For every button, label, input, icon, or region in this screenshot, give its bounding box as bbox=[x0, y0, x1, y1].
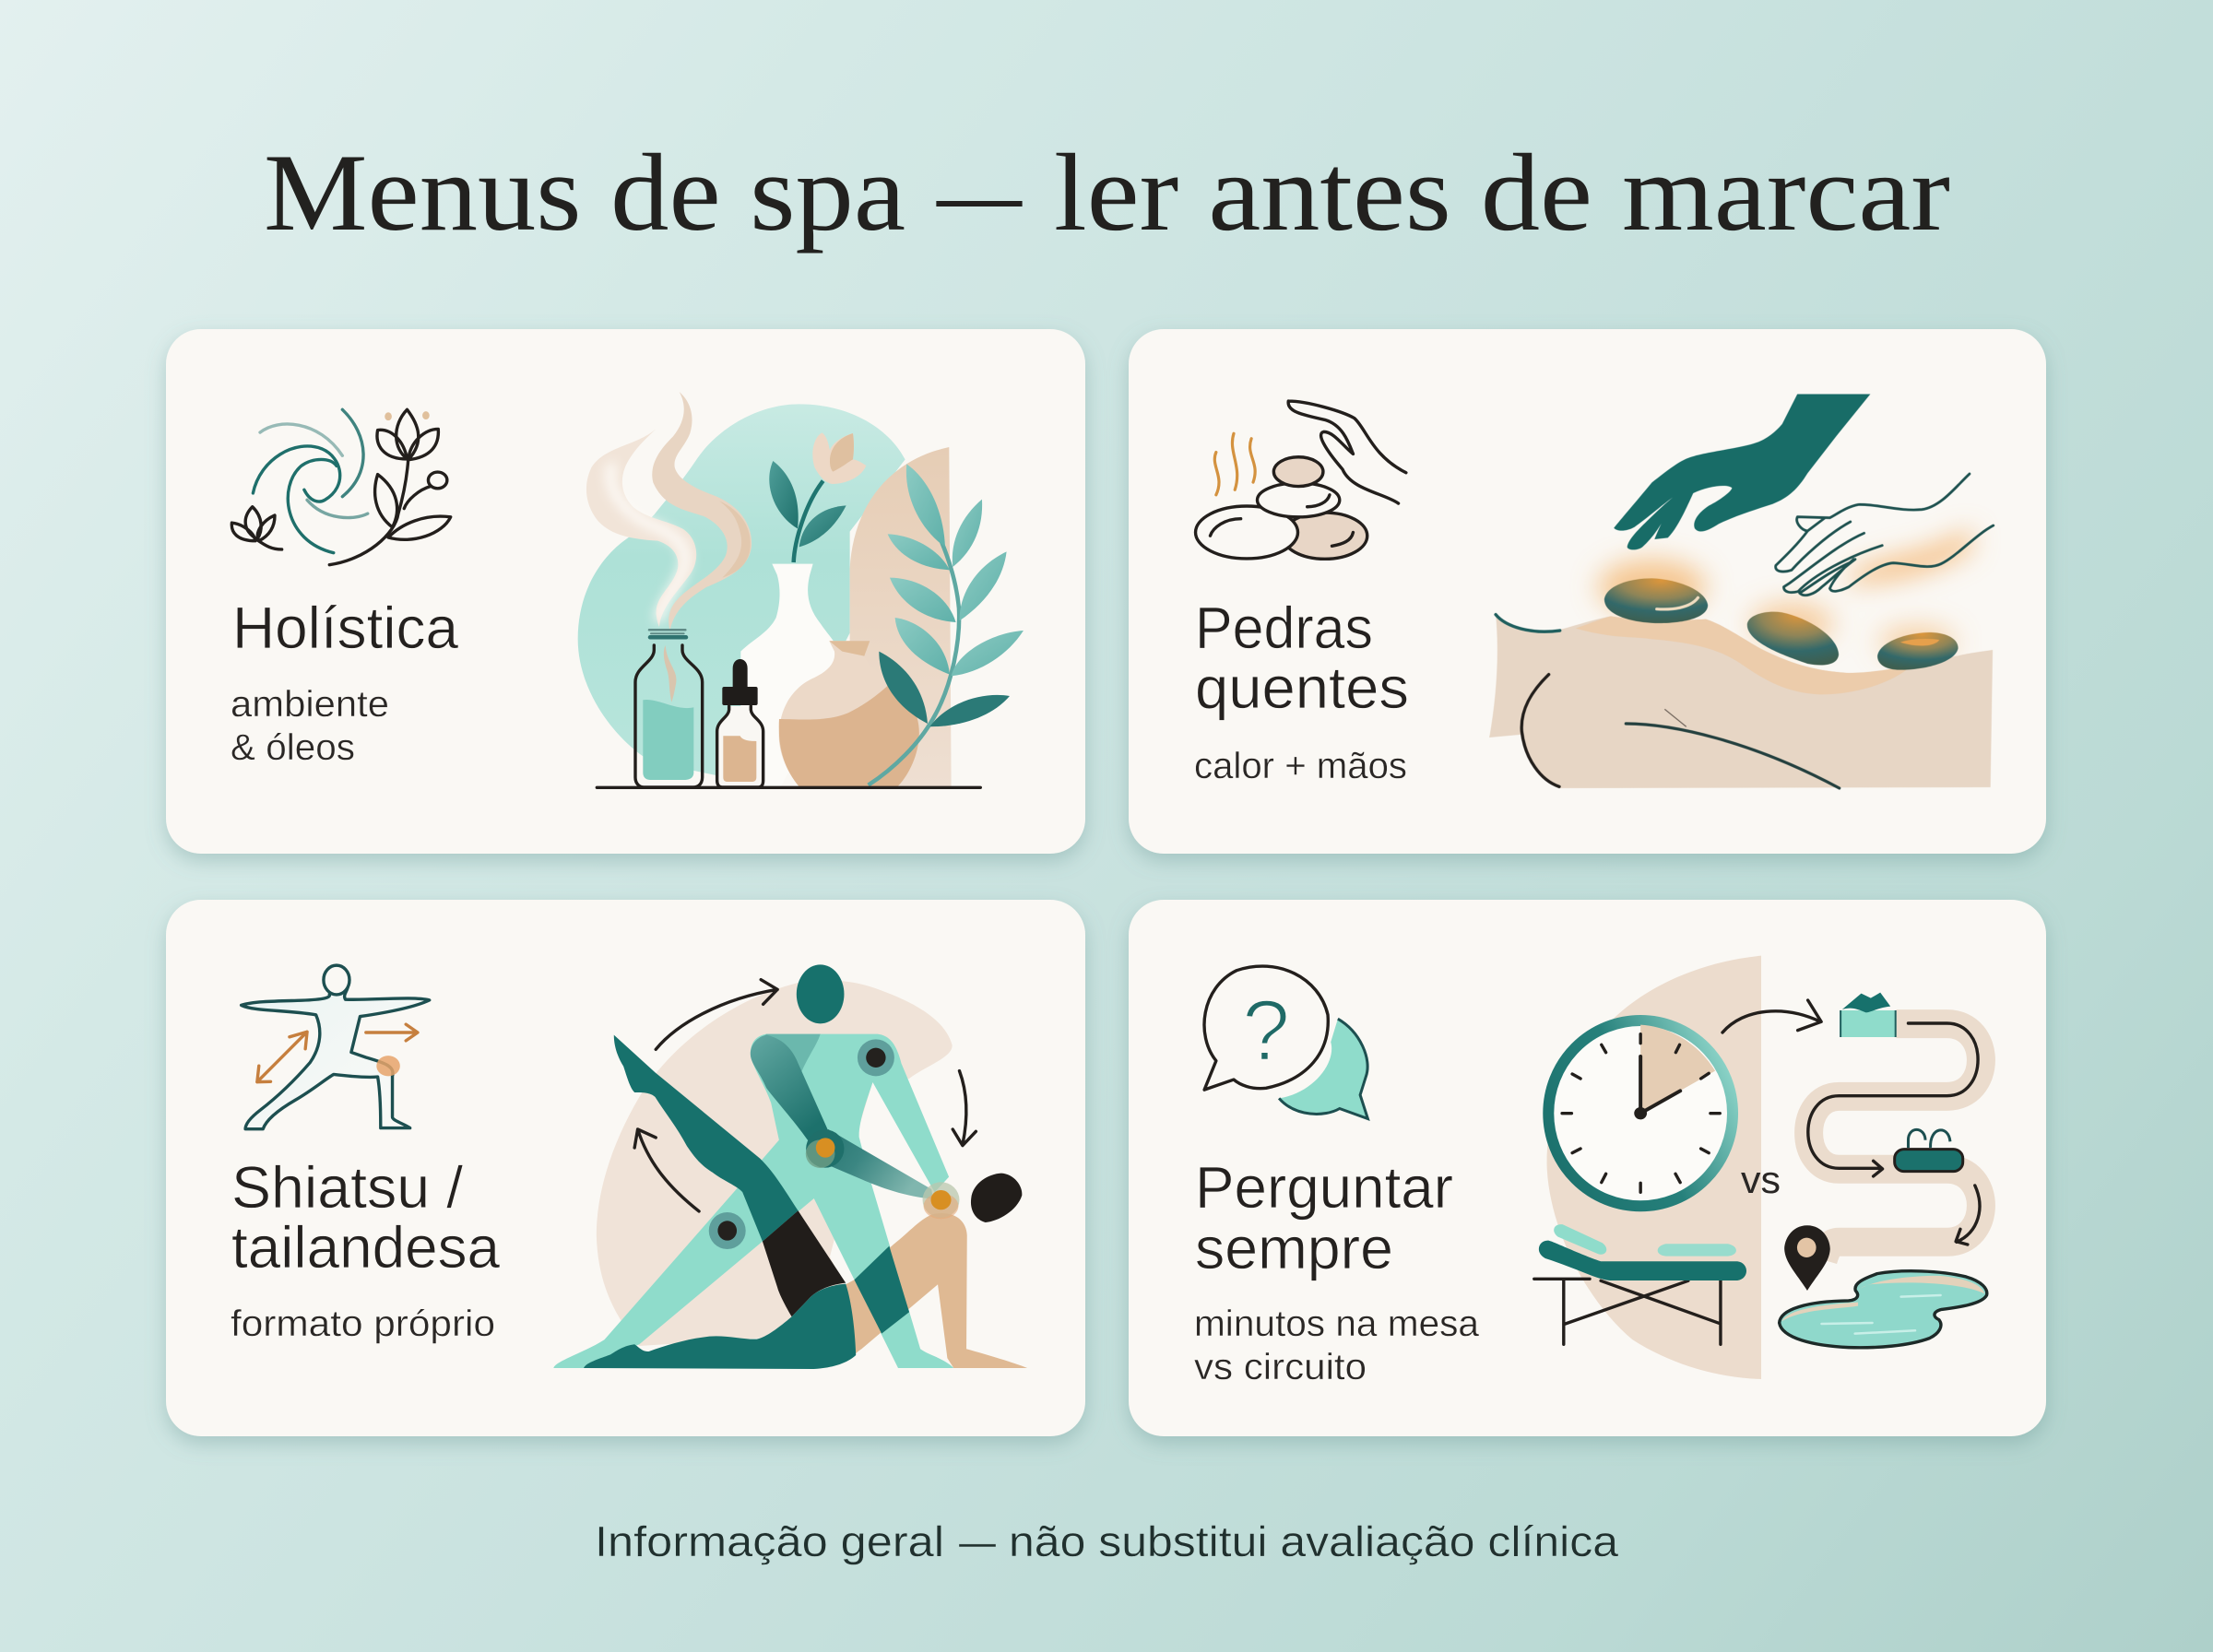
clock bbox=[1548, 1021, 1733, 1206]
illustration: aromatherapy still life bbox=[578, 392, 1024, 787]
description: formato próprio: formato próprio bbox=[231, 1304, 495, 1344]
description: ambiente & óleos bbox=[231, 684, 389, 768]
panel: Perguntar sempre bbox=[1129, 900, 2046, 1436]
footer disclaimer: — bbox=[959, 1517, 996, 1565]
description: minutos na mesa vs circuito: minutos na mesa bbox=[1194, 1304, 1480, 1344]
title: Menus de spa bbox=[264, 131, 905, 254]
panel: Holística bbox=[166, 329, 1085, 854]
stone 1 bbox=[1604, 578, 1708, 623]
title: — bbox=[936, 131, 1023, 254]
leafy branch bbox=[869, 464, 1024, 785]
pool bbox=[1780, 1271, 1987, 1348]
dark teal hand bbox=[1614, 394, 1870, 549]
black shorts bbox=[763, 1210, 846, 1316]
description: ambiente & óleos: & óleos bbox=[231, 727, 355, 768]
dropper bottle bbox=[717, 659, 763, 787]
warm band bbox=[1576, 616, 1912, 694]
beige arch bbox=[850, 447, 952, 786]
heading: Pedras quentes: Pedras bbox=[1195, 595, 1373, 661]
glass bottle bbox=[635, 630, 703, 787]
terracotta vessel bbox=[779, 641, 919, 786]
beige blob bbox=[597, 980, 953, 1346]
white vase bbox=[740, 564, 836, 786]
heading: Perguntar sempre: Perguntar bbox=[1195, 1154, 1453, 1221]
dark teal base bbox=[584, 1284, 856, 1369]
footer disclaimer: não substitui avaliação clínica bbox=[1009, 1517, 1618, 1565]
stone 2 bbox=[1747, 612, 1839, 665]
shelf line bbox=[597, 786, 980, 789]
heading: Shiatsu / tailandesa bbox=[231, 1154, 500, 1280]
mint standing figure bbox=[553, 1034, 953, 1368]
icon: stacked stones with hand bbox=[1196, 401, 1406, 559]
label: vs: vs bbox=[1741, 1158, 1781, 1201]
heading: Perguntar sempre: sempre bbox=[1195, 1215, 1393, 1281]
massage table bbox=[1534, 1224, 1746, 1344]
dark teal raised leg bbox=[614, 1035, 799, 1242]
sauna hut bbox=[1840, 993, 1896, 1037]
stone 3 bbox=[1877, 632, 1959, 670]
motion arrows bbox=[634, 980, 976, 1211]
beige half circle bbox=[1547, 956, 1761, 1379]
card background bbox=[1129, 329, 2046, 854]
illustration: hot stones on back bbox=[1489, 394, 1994, 788]
heat glows bbox=[1598, 528, 1972, 659]
outline hand bbox=[1776, 474, 1994, 596]
forearm bbox=[808, 1129, 933, 1199]
winding circuit path bbox=[1809, 1024, 1981, 1260]
heading: Shiatsu / tailandesa: tailandesa bbox=[231, 1214, 500, 1280]
fountain tub bbox=[1895, 1129, 1963, 1172]
heading: Pedras quentes bbox=[1195, 595, 1409, 721]
location pin bbox=[1784, 1225, 1830, 1291]
heading: Pedras quentes: quentes bbox=[1195, 655, 1409, 721]
panel: Shiatsu / tailandesa bbox=[166, 900, 1085, 1436]
description: ambiente & óleos: ambiente bbox=[231, 684, 389, 725]
sprig in vase bbox=[769, 432, 866, 562]
footer disclaimer bbox=[595, 1517, 1618, 1565]
icon: speech bubbles with question mark bbox=[1204, 966, 1367, 1119]
card background bbox=[166, 900, 1085, 1436]
icon: swirl and botanical sprig bbox=[231, 409, 451, 565]
heading: Holística: Holística bbox=[232, 595, 458, 661]
illustration: clock vs circuit bbox=[1534, 956, 1987, 1379]
beige smoke bbox=[652, 392, 751, 630]
heading: Shiatsu / tailandesa: Shiatsu / bbox=[231, 1154, 463, 1221]
pale smoke bbox=[586, 427, 696, 627]
description: minutos na mesa vs circuito bbox=[1194, 1304, 1480, 1387]
heads bbox=[797, 964, 1022, 1222]
card background bbox=[1129, 900, 2046, 1436]
leg overlap bbox=[854, 1246, 909, 1334]
icon: warrior pose with stretch arrows bbox=[242, 965, 430, 1129]
card background bbox=[166, 329, 1085, 854]
title: ler antes de marcar bbox=[1054, 131, 1950, 254]
description: calor + mãos: calor + mãos bbox=[1194, 746, 1407, 786]
footer disclaimer: Informação geral bbox=[595, 1517, 944, 1565]
icon: speech bubbles with question mark: ? bbox=[1242, 982, 1290, 1079]
heading: Perguntar sempre bbox=[1195, 1154, 1453, 1281]
body contour lines bbox=[1496, 615, 1840, 788]
circuit line and arrows bbox=[1722, 1000, 1980, 1245]
pressure points bbox=[709, 1039, 959, 1249]
description: minutos na mesa vs circuito: vs circuito bbox=[1194, 1347, 1367, 1387]
body bbox=[1489, 615, 1993, 788]
mint blob bbox=[578, 404, 905, 786]
shoulder shading bbox=[760, 1034, 821, 1072]
tan reclining leg bbox=[846, 1213, 1027, 1368]
panel: Pedras quentes bbox=[1129, 329, 2046, 854]
title bbox=[264, 131, 1950, 254]
upper arm bbox=[751, 1035, 828, 1140]
illustration: shiatsu figures bbox=[553, 964, 1027, 1369]
